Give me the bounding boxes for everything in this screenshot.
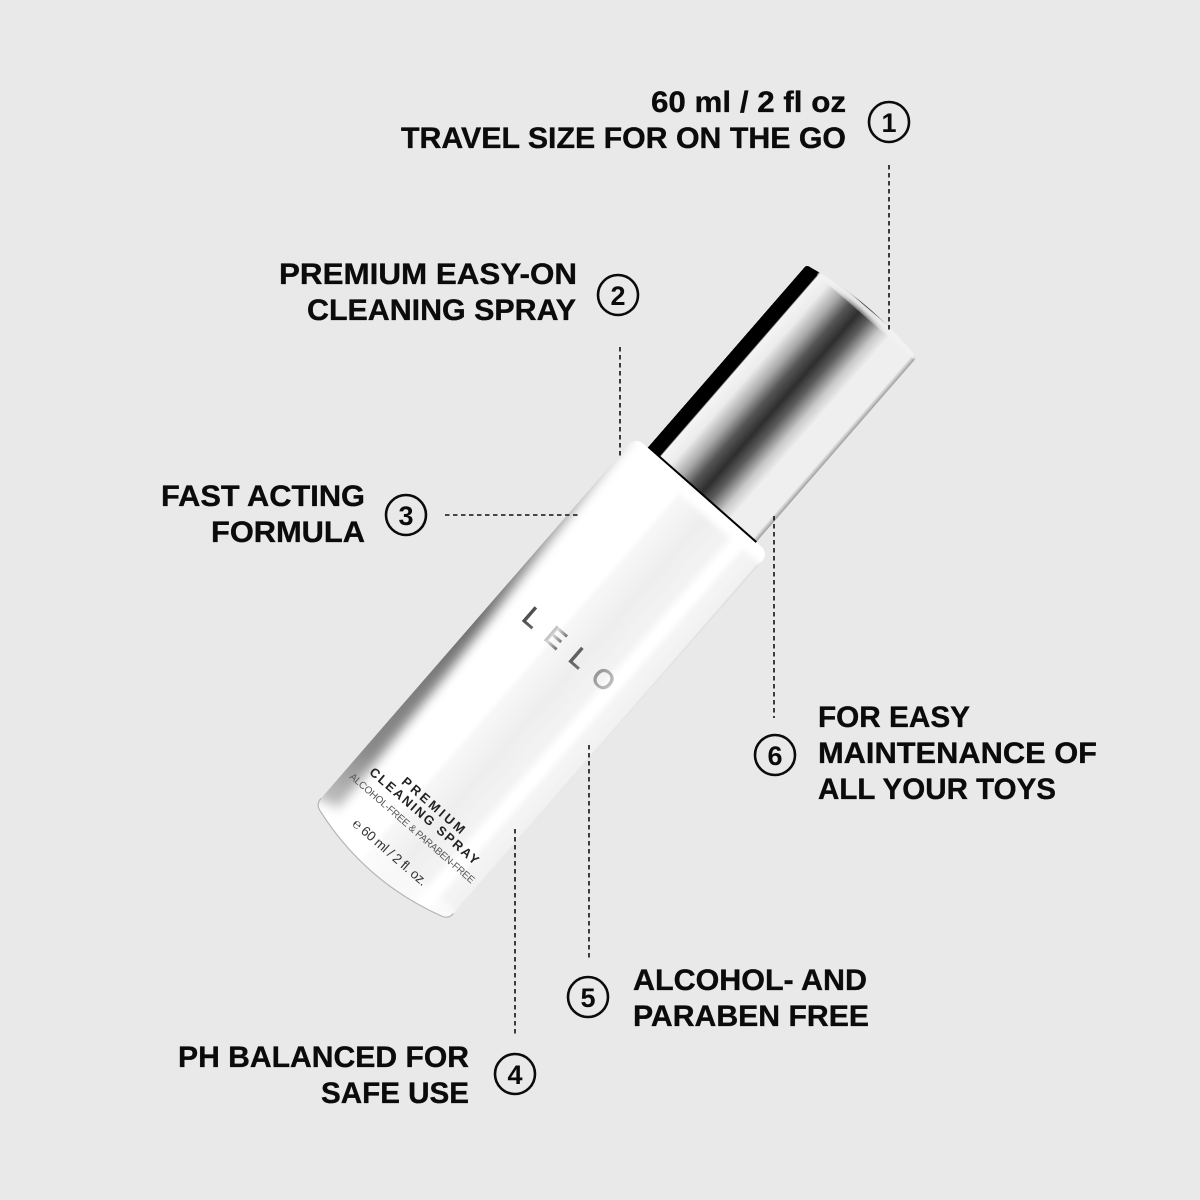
bottle label text: PREMIUM	[399, 774, 468, 837]
callout 5: alcohol and paraben free	[568, 745, 869, 1033]
callout 4: pH balanced: PH BALANCED FOR	[178, 1041, 469, 1074]
bottle body	[318, 441, 765, 918]
callout 3: fast acting	[161, 480, 578, 549]
callout 5: alcohol and paraben free: ALCOHOL- AND	[633, 964, 867, 997]
callout 3: fast acting: FAST ACTING	[161, 480, 365, 513]
product: spray bottle	[318, 266, 916, 918]
callout 3: fast acting: 3	[398, 501, 414, 531]
callout 4: pH balanced: 4	[507, 1060, 523, 1090]
bottle label text: CLEANING SPRAY	[367, 764, 482, 868]
bottle cap	[648, 266, 916, 541]
callout 2: easy-on spray: PREMIUM EASY-ON	[279, 258, 577, 291]
bottle label text: ALCOHOL-FREE & PARABEN-FREE	[347, 772, 477, 886]
LELO logo: LELO	[517, 601, 621, 698]
callout 6: easy maintenance: FOR EASY	[818, 701, 970, 734]
callout 6: easy maintenance: MAINTENANCE OF	[818, 737, 1097, 770]
callout 6: easy maintenance	[755, 516, 1097, 806]
callout 1: travel size	[401, 86, 909, 330]
callout 1: travel size: TRAVEL SIZE FOR ON THE GO	[401, 122, 846, 155]
callout 5: alcohol and paraben free: 5	[580, 983, 596, 1013]
infographic canvas	[162, 90, 1096, 1104]
bottle label text	[325, 746, 499, 912]
callout 2: easy-on spray: CLEANING SPRAY	[307, 294, 576, 327]
callout 4: pH balanced: SAFE USE	[321, 1077, 469, 1110]
callout 3: fast acting: FORMULA	[211, 516, 365, 549]
callout 4: pH balanced	[178, 829, 535, 1110]
callout 1: travel size: 60 ml / 2 fl oz	[651, 86, 846, 119]
callout 5: alcohol and paraben free: PARABEN FREE	[633, 1000, 869, 1033]
callout 2: easy-on spray	[279, 258, 638, 459]
callout 6: easy maintenance: ALL YOUR TOYS	[818, 773, 1056, 806]
bottle label text: ℮ 60 ml / 2 fl. oz.	[350, 816, 430, 889]
callout 1: travel size: 1	[881, 108, 897, 138]
callout 6: easy maintenance: 6	[767, 741, 783, 771]
callout 2: easy-on spray: 2	[610, 281, 626, 311]
